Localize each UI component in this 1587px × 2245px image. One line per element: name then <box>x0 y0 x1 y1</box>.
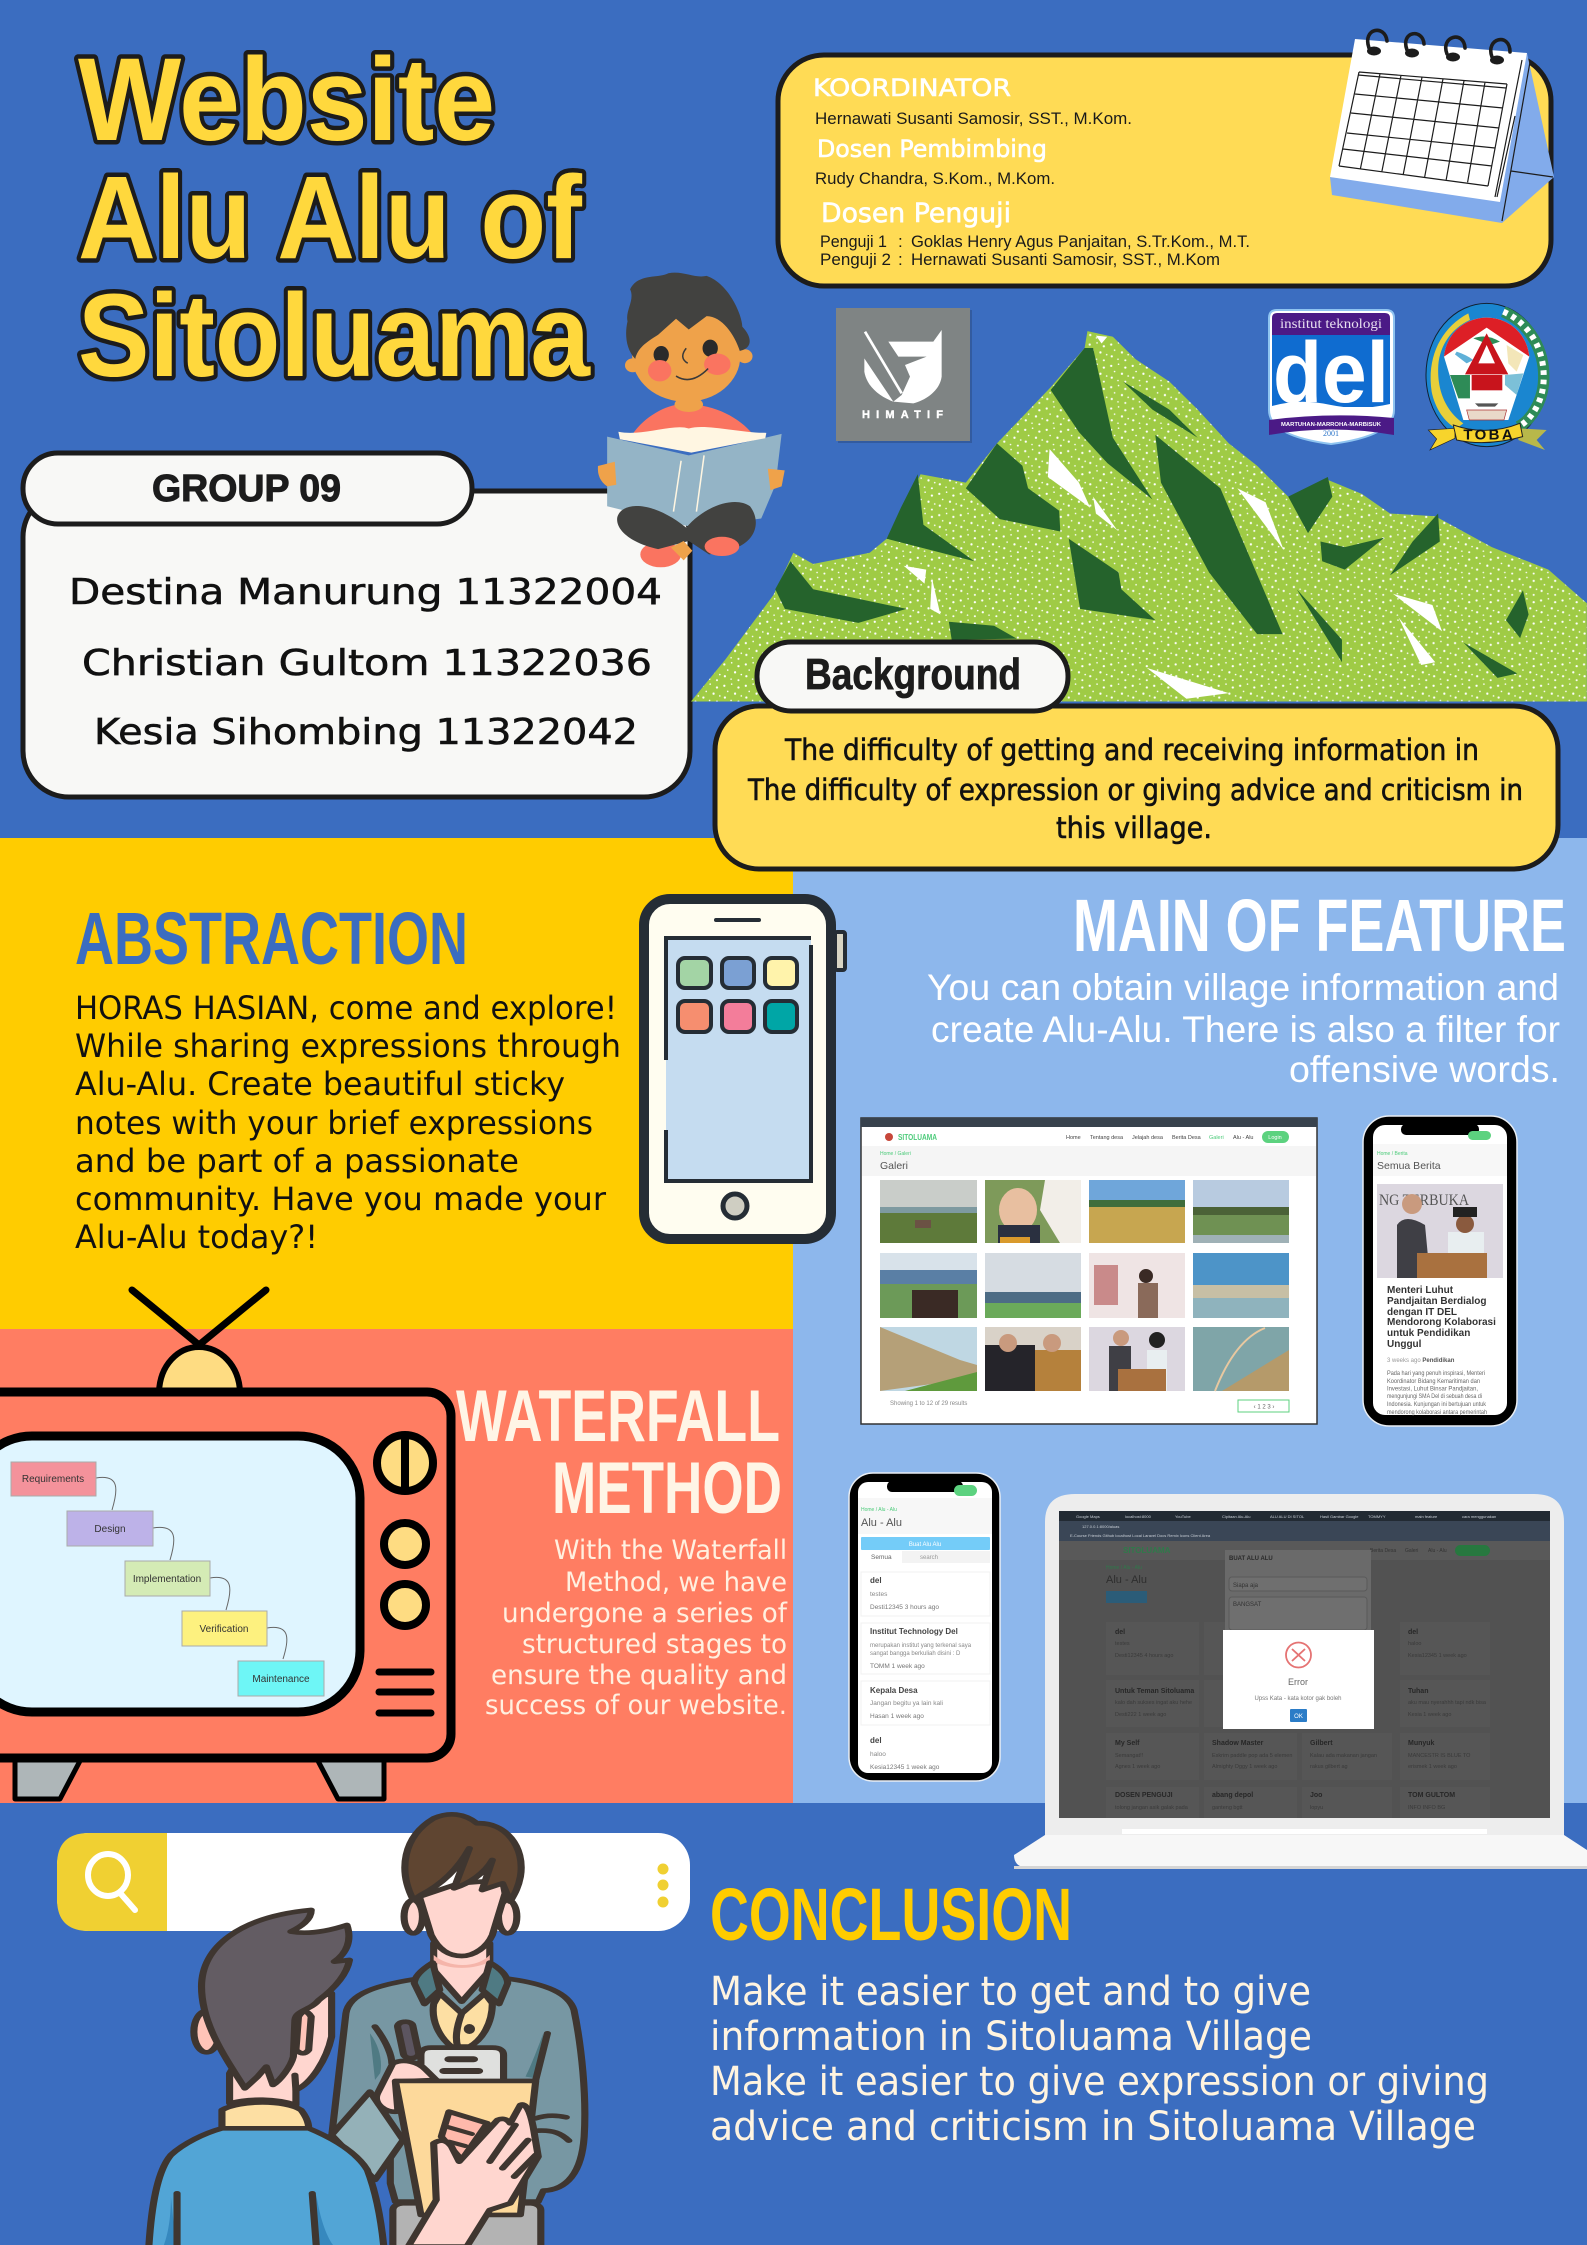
logo: institut teknologi del: del <box>1273 325 1389 421</box>
conclusion text: information in Sitoluama Village <box>710 2014 1312 2060</box>
laptop screen: INFO INFO BG <box>1408 1805 1445 1811</box>
background label and text <box>715 642 1558 869</box>
screenshot: mobile news page: 3 weeks ago Pendidikan <box>1387 1358 1455 1364</box>
background heading pill: Background <box>805 650 1021 699</box>
screenshot: mobile alu-alu page: TOMM 1 week ago <box>870 1663 925 1670</box>
laptop screen: Almighty Oggy 1 week ago <box>1212 1764 1277 1770</box>
person seen from behind <box>148 1910 385 2245</box>
member names: Destina Manurung 11322004 <box>69 572 662 613</box>
laptop screen: haloo <box>1408 1641 1421 1647</box>
panel: waterfall background <box>0 1329 793 1803</box>
screenshot: gallery page: Home / Galeri <box>880 1151 911 1157</box>
laptop screen: Kesia 1 week ago <box>1408 1712 1451 1718</box>
panel: coordinators and lecturers: Rudy Chandra, S.Kom., M.Kom. <box>815 169 1055 188</box>
form modal: Siapa aja <box>1233 1583 1259 1589</box>
screenshot: mobile news page: Semua Berita <box>1377 1160 1441 1172</box>
title <box>78 34 591 402</box>
laptop screen: Untuk Teman Sitoluama <box>1115 1688 1194 1695</box>
logo: Himatif: HIMATIF <box>862 409 943 421</box>
icon: smartphone <box>644 899 845 1239</box>
main of feature text <box>927 967 1560 1090</box>
logo: institut teknologi del: institut teknologi <box>1280 317 1382 332</box>
laptop screen: erismek 1 week ago <box>1408 1764 1457 1770</box>
member names: Kesia Sihombing 11322042 <box>94 712 638 753</box>
screenshot: mobile news page: dengan IT DEL <box>1387 1307 1457 1318</box>
abstraction text: HORAS HASIAN, come and explore! <box>75 989 617 1027</box>
abstraction text: While sharing expressions through <box>75 1027 621 1065</box>
laptop screen: rakus gilbert ag <box>1310 1764 1348 1770</box>
laptop screen: del <box>1115 1629 1125 1636</box>
screenshot: mobile alu-alu page: Hasan 1 week ago <box>870 1713 924 1720</box>
laptop screen: abang depol <box>1212 1792 1253 1799</box>
waterfall diagram: Implementation <box>133 1574 201 1585</box>
conclusion text <box>710 1969 1489 2150</box>
laptop screen: ALU ALU DI SITOL <box>1270 1514 1305 1519</box>
screenshot: mobile alu-alu page: haloo <box>870 1751 886 1758</box>
form modal: BUAT ALU ALU <box>1229 1556 1273 1562</box>
screenshot: mobile news page: untuk Pendidikan <box>1387 1328 1470 1339</box>
laptop screen: ganteng bgtt <box>1212 1805 1243 1811</box>
group heading pill: GROUP 09 <box>152 468 341 510</box>
illustration: retro television <box>0 1290 451 1799</box>
screenshot: mobile alu-alu page: Alu - Alu <box>861 1517 902 1529</box>
screenshot: mobile news page: NG TERBUKA <box>1379 1192 1469 1209</box>
screenshot: mobile alu-alu page: del <box>870 1576 882 1585</box>
main of feature text: create Alu-Alu. There is also a filter for <box>931 1009 1560 1050</box>
laptop screen: localhost:8000 <box>1125 1514 1152 1519</box>
screenshot: gallery page: Jelajah desa <box>1132 1135 1164 1141</box>
photo grid <box>880 1180 1289 1391</box>
screenshot: gallery page: Galeri <box>1209 1135 1224 1141</box>
screenshot: gallery page: Showing 1 to 12 of 29 results <box>890 1401 967 1407</box>
panel: coordinators and lecturers: Penguji 1 <box>820 232 887 251</box>
laptop screen: My Self <box>1115 1740 1140 1747</box>
screenshot: mobile news page: Pada hari yang penuh inspirasi, Menteri <box>1387 1371 1485 1377</box>
panel: coordinators and lecturers: : <box>898 250 903 269</box>
illustration: two people taking notes <box>148 1814 585 2245</box>
screenshot: gallery page: Login <box>1268 1135 1282 1141</box>
screenshot: gallery page: Berita Desa <box>1172 1135 1202 1141</box>
conclusion text: Make it easier to give expression or giving <box>710 2059 1489 2105</box>
abstraction text: notes with your brief expressions <box>75 1104 593 1142</box>
panel: coordinators and lecturers: Penguji 2 <box>820 250 891 269</box>
screenshot: gallery page: Tentang desa <box>1090 1135 1124 1141</box>
error dialog: Error <box>1288 1677 1308 1687</box>
screenshot: mobile alu-alu page: search <box>920 1555 938 1561</box>
abstraction heading: ABSTRACTION <box>75 897 468 980</box>
icon: magnifier <box>88 1854 135 1910</box>
screenshot: mobile news page: Investasi, Luhut Binsar Pandjaitan, <box>1387 1386 1478 1392</box>
laptop screen: Gilbert <box>1310 1740 1333 1747</box>
screenshot: mobile news page: mengunjungi SMA Del di sebuah desa di <box>1387 1394 1482 1400</box>
hand holding the clipboard <box>408 2105 538 2245</box>
waterfall diagram <box>11 1462 324 1696</box>
screenshot: mobile alu-alu page: Home / Alu - Alu <box>861 1507 897 1513</box>
laptop screen: Berita Desa <box>1370 1548 1396 1554</box>
laptop screen: Galeri <box>1405 1548 1418 1554</box>
laptop screen: Home / Alu - Alu <box>1106 1565 1142 1571</box>
background description: The difficulty of expression or giving advice and criticism in <box>747 773 1523 807</box>
laptop screen: Desti12345 4 hours ago <box>1115 1653 1173 1659</box>
waterfall heading: METHOD <box>552 1448 782 1529</box>
screenshot: mobile alu-alu page <box>849 1473 1000 1781</box>
panel: coordinators and lecturers: KOORDINATOR <box>813 74 1011 102</box>
abstraction text <box>75 989 621 1256</box>
waterfall text <box>485 1535 788 1721</box>
laptop screen: kalo dah sukses ingat aku hehe <box>1115 1700 1192 1706</box>
screenshot: mobile news page: Pandjaitan Berdialog <box>1387 1296 1486 1307</box>
abstraction text: community. Have you made your <box>75 1180 607 1218</box>
laptop screen: Kalau ada makanan jangan <box>1310 1753 1377 1759</box>
illustration: laptop with error dialog <box>1014 1494 1587 1869</box>
laptop screen <box>1059 1511 1550 1818</box>
main of feature text: offensive words. <box>1289 1049 1560 1090</box>
laptop screen: Kesia12345 1 week ago <box>1408 1653 1467 1659</box>
laptop screen: Hasil Gambar Google <box>1320 1514 1359 1519</box>
screenshot: mobile alu-alu page: Semua <box>871 1554 892 1561</box>
waterfall text: undergone a series of <box>502 1598 788 1629</box>
person facing viewer <box>332 1814 585 2245</box>
laptop screen: cara menggunakan <box>1462 1514 1496 1519</box>
illustration: boy reading a book <box>598 273 785 567</box>
illustration: green mountain <box>691 331 1587 701</box>
screenshot: mobile news page: Indonesia. Kunjungan ini bertujuan untuk <box>1387 1402 1487 1408</box>
background description: The difficulty of getting and receiving information in <box>784 733 1479 767</box>
main of feature text: You can obtain village information and <box>927 967 1559 1008</box>
screenshot: gallery page: Alu - Alu <box>1233 1135 1253 1141</box>
waterfall text: Method, we have <box>565 1567 787 1598</box>
laptop screen: lopyu <box>1310 1805 1323 1811</box>
title: Alu Alu of <box>78 152 583 284</box>
laptop screen: YouTube <box>1175 1514 1191 1519</box>
logo: Himatif <box>836 308 972 443</box>
screenshot: mobile alu-alu page: Kesia12345 1 week ago <box>870 1764 940 1771</box>
abstraction text: and be part of a passionate <box>75 1142 519 1180</box>
title: Website <box>78 34 495 166</box>
waterfall text: ensure the quality and <box>491 1660 787 1691</box>
abstraction text: Alu-Alu. Create beautiful sticky <box>75 1065 565 1103</box>
waterfall diagram: Requirements <box>22 1474 84 1485</box>
screenshot: mobile news page: Menteri Luhut <box>1387 1285 1454 1296</box>
logo: institut teknologi del: MARTUHAN-MARROHA-MARBISUK <box>1281 422 1381 428</box>
laptop screen: Cipitaan Alu-Alu <box>1222 1514 1250 1519</box>
logo: Toba regency crest <box>1426 303 1547 450</box>
screenshot: mobile alu-alu page: testes <box>870 1591 888 1598</box>
laptop screen: Agnes 1 week ago <box>1115 1764 1160 1770</box>
conclusion text: advice and criticism in Sitoluama Village <box>710 2104 1476 2150</box>
form modal: BANGSAT <box>1233 1602 1262 1608</box>
laptop screen: tolong jangan asik galak pada <box>1115 1805 1189 1811</box>
error dialog: Upss Kata - kata kotor gak boleh <box>1254 1696 1342 1702</box>
panel: coordinators and lecturers: Goklas Henry Agus Panjaitan, S.Tr.Kom., M.T. <box>911 232 1250 251</box>
screenshot: mobile news page <box>1363 1116 1517 1426</box>
icon: desk calendar <box>1330 30 1554 223</box>
logo: institut teknologi del: 2001 <box>1323 429 1339 438</box>
panel: coordinators and lecturers: Dosen Pembimbing <box>817 135 1047 163</box>
laptop screen: TOM GULTOM <box>1408 1792 1455 1799</box>
waterfall diagram: Design <box>94 1524 126 1535</box>
group heading pill <box>23 453 472 524</box>
screenshot: mobile alu-alu page: Kepala Desa <box>870 1686 918 1695</box>
background description: this village. <box>1056 811 1212 845</box>
logo: institut teknologi del <box>1269 310 1394 444</box>
screenshot: mobile alu-alu page: Desti12345 3 hours ago <box>870 1604 939 1611</box>
laptop screen: main feature <box>1415 1514 1438 1519</box>
panel: coordinators and lecturers: : <box>898 232 903 251</box>
laptop screen: Munyuk <box>1408 1740 1435 1747</box>
panel: coordinators and lecturers: Dosen Penguji <box>821 198 1011 229</box>
screenshot: mobile alu-alu page: Buat Alu Alu <box>909 1542 941 1548</box>
waterfall text: structured stages to <box>522 1629 787 1660</box>
screenshot: gallery page <box>861 1118 1317 1424</box>
panel: group members <box>23 453 690 797</box>
waterfall heading: WATERFALL <box>456 1376 780 1457</box>
waterfall diagram: Verification <box>200 1624 248 1635</box>
form modal <box>1225 1550 1371 1630</box>
laptop screen: Google Maps <box>1076 1514 1100 1519</box>
screenshot: mobile alu-alu page: Jangan begitu ya lain kali <box>870 1700 943 1707</box>
error dialog <box>1223 1630 1374 1729</box>
laptop screen: Desti222 1 week ago <box>1115 1712 1166 1718</box>
laptop screen: Alu - Alu <box>1428 1548 1447 1554</box>
member names: Christian Gultom 11322036 <box>82 643 652 684</box>
background description <box>747 733 1523 845</box>
screenshot: mobile news page: Home / Berita <box>1377 1151 1408 1157</box>
waterfall text: With the Waterfall <box>554 1535 787 1566</box>
laptop screen: Tuhan <box>1408 1688 1428 1695</box>
laptop screen: Alu - Alu <box>1106 1574 1147 1586</box>
error dialog: OK <box>1294 1714 1303 1720</box>
logo: Toba regency crest: TOBA <box>1463 427 1513 444</box>
laptop screen: SITOLUAMA <box>1123 1546 1171 1555</box>
member names <box>69 572 662 753</box>
screenshot: mobile alu-alu page: sangat bangga berkuliah disini : D <box>870 1651 961 1657</box>
waterfall diagram: Maintenance <box>252 1674 310 1685</box>
screenshot: mobile news page: mendorong kolaborasi antara pemerintah <box>1387 1410 1487 1416</box>
background heading pill <box>757 642 1068 711</box>
title: Sitoluama <box>78 270 591 402</box>
screenshot: gallery page: SITOLUAMA <box>898 1133 937 1142</box>
search bar <box>57 1833 690 1931</box>
laptop screen: Joo <box>1310 1792 1322 1799</box>
laptop screen: TOMMYY <box>1368 1514 1386 1519</box>
panel: coordinators and lecturers: Hernawati Susanti Samosir, SST., M.Kom. <box>815 109 1132 128</box>
panel: main of feature background <box>793 838 1587 1803</box>
laptop screen: testes <box>1115 1641 1130 1647</box>
screenshot: mobile news page: Mendorong Kolaborasi <box>1387 1317 1496 1328</box>
waterfall heading <box>456 1376 782 1529</box>
laptop screen: del <box>1408 1629 1418 1636</box>
waterfall text: success of our website. <box>485 1690 787 1721</box>
screenshot: gallery page: ‹ 1 2 3 › <box>1254 1404 1274 1410</box>
screenshot: mobile news page: Unggul <box>1387 1339 1422 1350</box>
laptop screen: 127.0.0.1:8000/aluas <box>1082 1524 1119 1529</box>
laptop screen: Shadow Master <box>1212 1740 1264 1747</box>
laptop screen: aku mau nyerahhh tapi ndk bisa <box>1408 1700 1487 1706</box>
panel: coordinators and lecturers <box>778 55 1551 286</box>
laptop screen: DOSEN PENGUJI <box>1115 1792 1173 1799</box>
screenshot: mobile alu-alu page: del <box>870 1736 882 1745</box>
screenshot: gallery page: Galeri <box>880 1160 908 1172</box>
laptop screen: E-Course Friends Github localhost Local Laravel Docs Remix Icons Client Area <box>1070 1533 1211 1538</box>
panel: abstraction background <box>0 838 793 1329</box>
laptop screen: Semangat!! <box>1115 1753 1144 1759</box>
abstraction text: Alu-Alu today?! <box>75 1218 318 1256</box>
screenshot: mobile news page: Koordinator Bidang Kemaritiman dan <box>1387 1379 1480 1385</box>
conclusion heading: CONCLUSION <box>710 1873 1072 1956</box>
laptop screen: Eskrim paddle pop ada 5 elemen <box>1212 1753 1292 1759</box>
panel: coordinators and lecturers: Hernawati Susanti Samosir, SST., M.Kom <box>911 250 1220 269</box>
screenshot: gallery page: Home <box>1066 1135 1081 1141</box>
laptop screen: MANCESTR IS BLUE TO <box>1408 1753 1471 1759</box>
conclusion text: Make it easier to get and to give <box>710 1969 1311 2015</box>
screenshot: mobile alu-alu page: Institut Technology Del <box>870 1627 958 1636</box>
screenshot: mobile alu-alu page: merupakan institut yang terkenal saya <box>870 1643 972 1649</box>
